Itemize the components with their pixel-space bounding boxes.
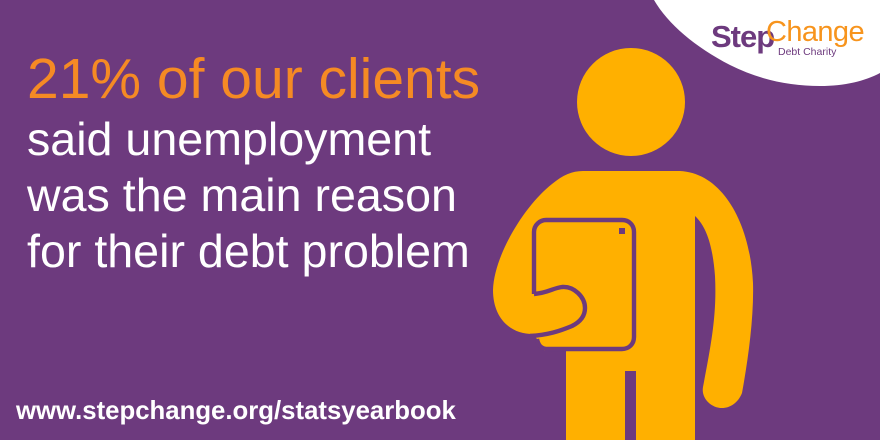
logo: StepChange Debt Charity: Step [711, 18, 774, 54]
logo: StepChange Debt Charity: Change [766, 16, 864, 48]
person body and arms [493, 171, 753, 440]
website url: www.stepchange.org/statsyearbook [16, 397, 456, 425]
text block: main statement: said unemployment [27, 113, 431, 165]
text block: main statement [26, 113, 470, 277]
text block: main statement: for their debt problem [27, 225, 470, 277]
heading: 21% of our clients: 21% of our clients [27, 47, 480, 111]
logo: StepChange Debt Charity [711, 16, 864, 58]
text block: main statement: was the main reason [27, 169, 457, 221]
logo: StepChange Debt Charity: Debt Charity [778, 46, 836, 58]
person head [577, 48, 685, 156]
folder outline [530, 220, 634, 349]
folder punch hole [619, 228, 625, 234]
